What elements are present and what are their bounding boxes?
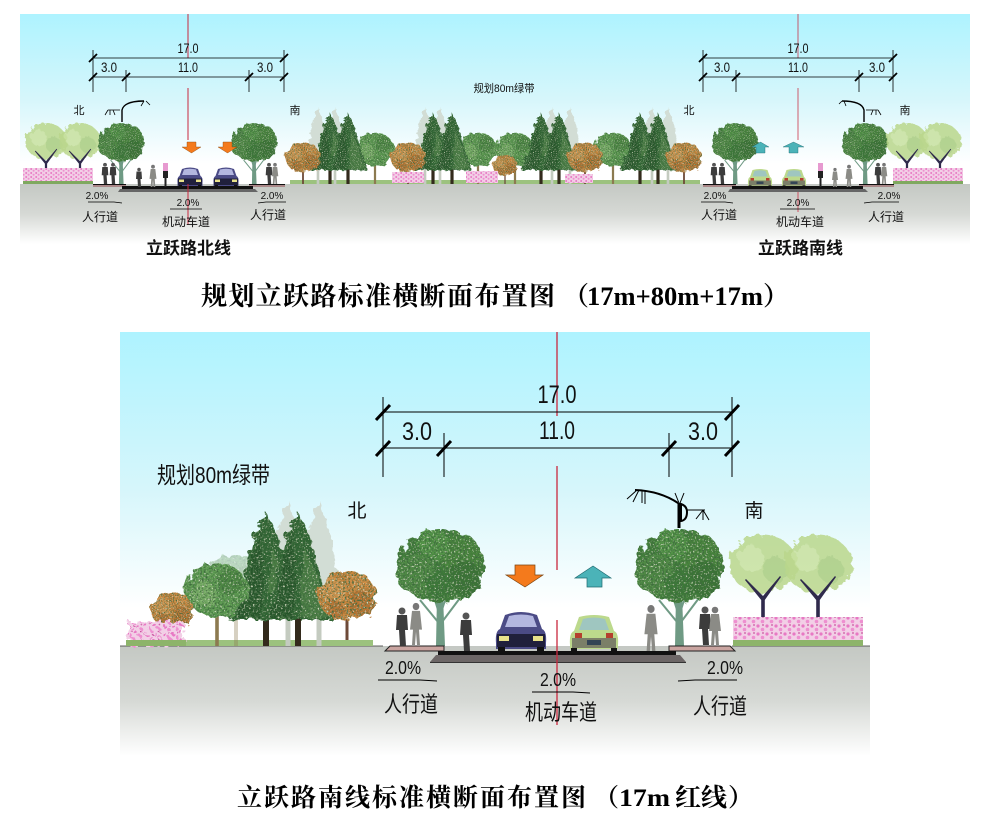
title: south line cross-section: 红线 <box>675 784 727 812</box>
dimension lines: 17.0 <box>538 381 576 409</box>
title: south line cross-section: ） <box>728 784 753 812</box>
slope and label: right sidewalk <box>678 658 747 719</box>
road section: south line <box>703 184 894 192</box>
dimension lines: 3.0 <box>402 418 432 446</box>
slope and road labels: north road: 人行道 <box>250 208 286 222</box>
north road roadside planting <box>23 123 277 184</box>
cars and pedestrians: north line <box>102 163 278 188</box>
icon: orange direction arrow <box>506 565 543 587</box>
slope and label: right sidewalk: 2.0% <box>707 658 743 678</box>
dimension lines: south road: 11.0 <box>788 59 808 75</box>
icon: street lamp north line <box>105 101 150 122</box>
dimension lines: north road <box>89 40 288 92</box>
slope and road labels: north road: 2.0% <box>86 191 109 202</box>
slope and label: carriageway: 机动车道 <box>525 700 597 725</box>
labels: directions and green belt <box>74 81 910 117</box>
dimension lines: north road: 3.0 <box>257 59 273 75</box>
dimension lines <box>376 381 739 477</box>
icon: orange direction arrows <box>182 142 237 153</box>
dimension lines: 3.0 <box>688 418 718 446</box>
title: overall cross-section: 17m+80m+17m <box>587 282 763 311</box>
title: south line cross-section <box>237 784 753 812</box>
dimension lines: north road: 11.0 <box>178 59 198 75</box>
slope and road labels: south road: 2.0% <box>787 198 810 209</box>
slope and road labels: north road: 2.0% <box>177 198 200 209</box>
street trees <box>396 529 723 646</box>
sky background <box>20 14 970 184</box>
labels: directions and green belt: 北 <box>684 104 694 117</box>
roadside willows and flower bed <box>729 535 863 646</box>
dimension lines: south road <box>699 40 897 92</box>
road section <box>385 646 735 663</box>
slope and label: carriageway: 2.0% <box>540 670 576 690</box>
slope and road labels: south road: 2.0% <box>704 191 727 202</box>
title: overall cross-section: 规划立跃路标准横断面布置图 <box>201 281 555 311</box>
title: south line cross-section: 17m <box>619 785 670 812</box>
road section: north line <box>93 184 285 192</box>
slope and road labels: north road: 2.0% <box>261 191 284 202</box>
slope and road labels: south road: 人行道 <box>701 208 737 222</box>
panel: overall cross-section 17m+80m+17m <box>20 14 970 258</box>
title: overall cross-section: ） <box>763 282 789 311</box>
label: north: 北 <box>347 500 367 522</box>
labels: directions and green belt: 北 <box>74 104 84 117</box>
cars and pedestrians: south line <box>711 163 887 188</box>
title: overall cross-section: （ <box>563 282 589 311</box>
road name: north line: 立跃路北线 <box>146 238 231 258</box>
title: overall cross-section <box>201 281 789 311</box>
label: planned 80m green belt: 规划80m绿带 <box>157 462 270 488</box>
dimension lines: south road: 17.0 <box>788 40 809 56</box>
slope and road labels: south road: 机动车道 <box>776 214 824 229</box>
icon: street lamp <box>627 490 709 528</box>
labels: directions and green belt: 南 <box>290 104 300 117</box>
dimension lines: south road: 3.0 <box>869 59 885 75</box>
slope and road labels: south road: 人行道 <box>868 210 904 224</box>
labels: directions and green belt: 规划80m绿带 <box>474 81 534 95</box>
sky background <box>120 332 870 646</box>
panel: south line enlarged cross-section <box>120 332 870 756</box>
slope and road labels: north road: 人行道 <box>82 210 118 224</box>
centre line: north road <box>187 14 189 225</box>
dimension lines: 11.0 <box>539 417 575 445</box>
title: south line cross-section: （ <box>594 784 619 812</box>
centre line: south road <box>797 14 799 212</box>
ground <box>120 646 870 756</box>
slope and label: carriageway <box>525 670 597 725</box>
labels: directions and green belt: 南 <box>900 104 910 117</box>
dimension lines: north road: 3.0 <box>101 59 117 75</box>
green belt planting <box>286 107 701 184</box>
slope and road labels: north road <box>82 191 286 229</box>
road name: south line: 立跃路南线 <box>758 238 843 258</box>
icon: street lamp south line <box>839 101 881 122</box>
slope and label: left sidewalk: 2.0% <box>385 658 421 678</box>
ground <box>20 184 970 244</box>
slope and label: left sidewalk: 人行道 <box>384 692 438 717</box>
slope and road labels: south road <box>701 191 904 229</box>
green belt planting <box>126 500 376 646</box>
slope and label: right sidewalk: 人行道 <box>693 694 747 719</box>
icon: teal direction arrows <box>752 142 804 153</box>
centre line <box>556 332 558 725</box>
slope and label: left sidewalk <box>378 658 438 717</box>
south road roadside planting <box>712 123 963 184</box>
dimension lines: north road: 17.0 <box>178 40 199 56</box>
slope and road labels: north road: 机动车道 <box>162 214 210 229</box>
icon: teal direction arrow <box>575 566 611 587</box>
dimension lines: south road: 3.0 <box>714 59 730 75</box>
slope and road labels: south road: 2.0% <box>878 191 901 202</box>
pedestrians <box>396 603 721 651</box>
cars <box>496 612 618 653</box>
title: south line cross-section: 立跃路南线标准横断面布置图 <box>237 784 586 812</box>
label: south: 南 <box>744 500 764 522</box>
